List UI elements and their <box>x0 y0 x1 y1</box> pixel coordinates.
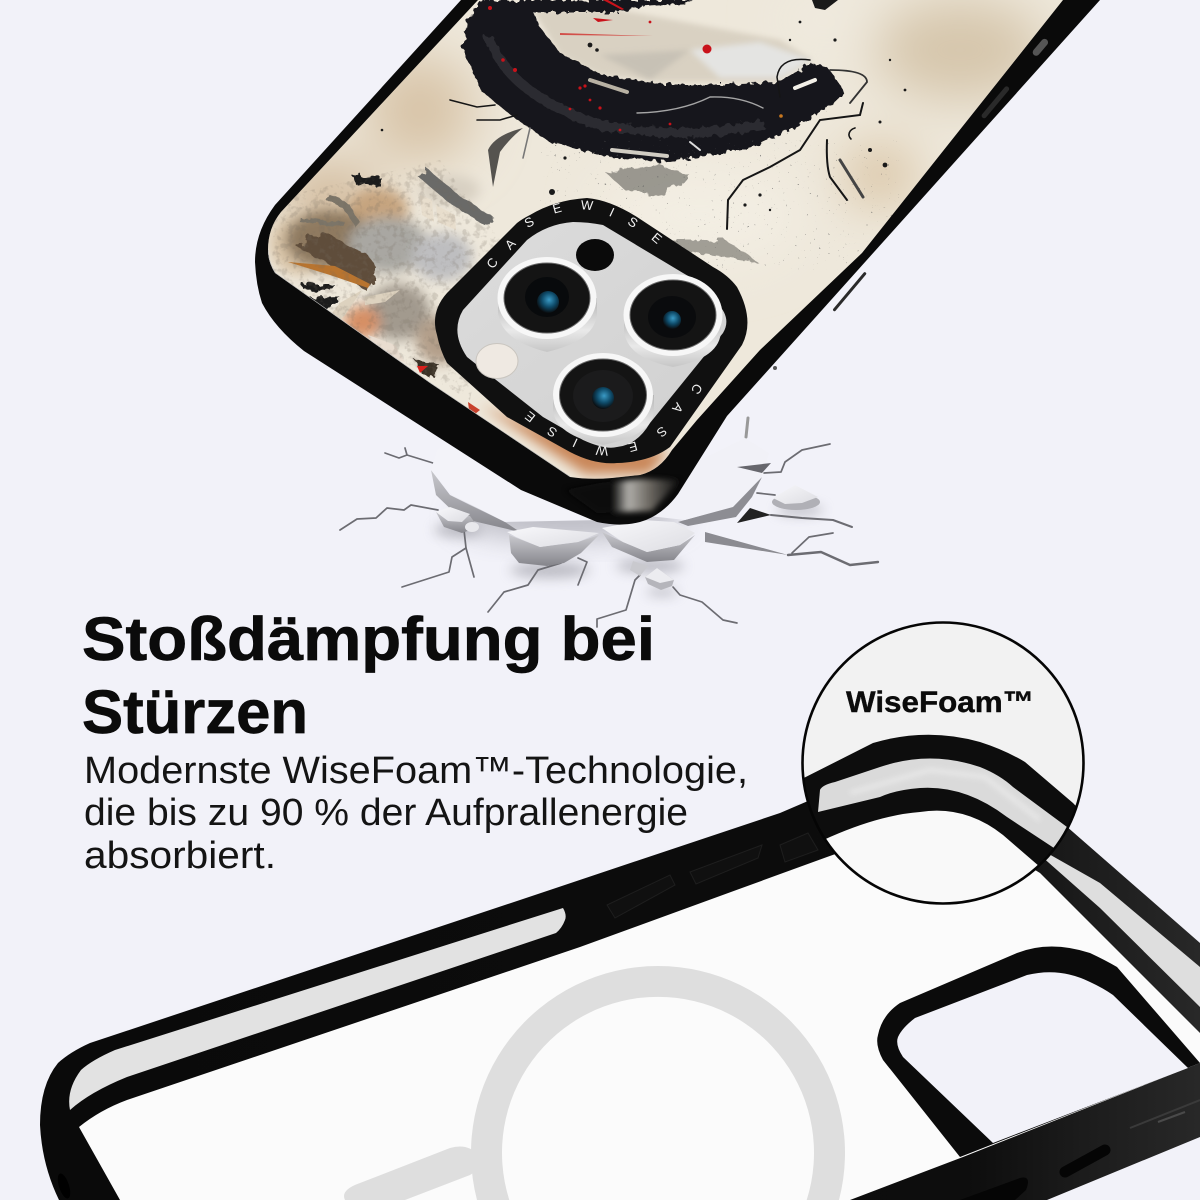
heading: Stoßdämpfung bei <box>82 605 655 673</box>
CASEWISE rim lettering: S <box>544 423 560 441</box>
swirl brush streaks <box>490 40 815 156</box>
left ground slab <box>431 440 600 532</box>
bumper highlight at corner <box>565 479 680 513</box>
CASEWISE rim lettering: E <box>649 230 665 247</box>
rock chunk: center right <box>602 520 695 562</box>
side buttons <box>773 37 1049 370</box>
CASEWISE rim lettering <box>483 197 706 459</box>
magnet alignment bar <box>344 1147 479 1200</box>
magnet ring <box>471 966 845 1200</box>
spike stroke <box>488 128 523 187</box>
WiseFoam label: WiseFoam™ <box>846 686 1034 719</box>
cracked ground impact <box>340 418 878 627</box>
left side air channel <box>69 908 566 1110</box>
clear back panel <box>79 815 1200 1200</box>
CASEWISE rim lettering: S <box>653 423 670 441</box>
camera cut-out <box>877 946 1200 1157</box>
CASEWISE rim lettering: I <box>570 435 580 450</box>
CASEWISE rim lettering: E <box>627 438 639 455</box>
case artwork <box>250 0 1080 490</box>
grey brush strokes <box>300 172 490 225</box>
CASEWISE rim lettering: E <box>551 200 563 217</box>
magnifier outline <box>802 622 1084 904</box>
orange streak <box>288 262 370 288</box>
crack lines <box>340 418 878 627</box>
CASEWISE rim lettering: C <box>688 381 706 397</box>
camera bump <box>435 197 747 463</box>
case bumper <box>255 0 1100 525</box>
magnifier callout <box>801 621 1085 905</box>
magnifier fill <box>802 622 1084 904</box>
transparent case photo <box>40 735 1200 1200</box>
rock chunk: left small <box>436 507 479 533</box>
camera rim <box>435 198 747 463</box>
lens 1 <box>498 257 597 352</box>
paper base <box>250 0 1080 490</box>
CASEWISE rim lettering: S <box>625 214 641 231</box>
dark brown mass <box>295 232 378 292</box>
heading <box>82 605 655 746</box>
case black frame <box>40 735 1200 1200</box>
swirl interior light wash <box>533 10 812 82</box>
side buttons <box>607 833 818 918</box>
wash blobs <box>272 0 1050 228</box>
CASEWISE rim lettering: W <box>580 197 594 213</box>
cream shards <box>328 195 456 362</box>
body text: absorbiert. <box>84 835 276 877</box>
channel highlight <box>850 770 1040 820</box>
flash <box>476 344 518 378</box>
microphone hole <box>576 239 614 271</box>
ink lines <box>450 59 867 229</box>
impact shadow <box>455 496 685 540</box>
fine speckle <box>540 140 900 270</box>
body text: Modernste WiseFoam™-Technologie, <box>84 750 748 792</box>
CASEWISE rim lettering: A <box>669 400 686 416</box>
CASEWISE rim lettering: W <box>595 443 609 459</box>
silver camera plate <box>457 222 726 448</box>
body text <box>84 750 748 877</box>
CASEWISE rim lettering: E <box>522 408 538 425</box>
phone with painted case <box>250 0 1100 525</box>
heading: Stürzen <box>82 678 308 746</box>
lens 2 <box>624 274 722 367</box>
red and black splatter <box>488 0 712 131</box>
rock chunk: center left <box>507 527 599 566</box>
CASEWISE rim lettering: I <box>607 205 617 220</box>
rock chunk: bottom pebbles <box>630 561 674 590</box>
CASEWISE rim lettering: C <box>483 255 501 271</box>
chunk shadows <box>434 505 824 596</box>
lens 3 <box>553 353 654 445</box>
red fleck <box>417 366 428 373</box>
CASEWISE rim lettering: S <box>522 213 537 231</box>
right ground slab <box>640 438 788 555</box>
magnified air channel <box>818 758 1067 850</box>
lower grey washes <box>605 165 690 195</box>
rock chunk: right pebble <box>772 485 820 510</box>
magnified case corner <box>804 734 1076 865</box>
dark brush marks <box>302 175 440 378</box>
black ink swirl <box>463 0 845 162</box>
magnified frame <box>804 734 1076 865</box>
camera cut-out opening <box>897 972 1188 1143</box>
art edge highlight <box>268 250 570 477</box>
bottom edge details <box>55 1100 1200 1200</box>
CASEWISE rim lettering: A <box>502 236 519 252</box>
lower left smoke and pigments <box>270 175 668 474</box>
magnified clear panel <box>800 800 1090 920</box>
right side air channel <box>1040 849 1200 1007</box>
body text: die bis zu 90 % der Aufprallenergie <box>84 792 688 834</box>
pigment grit <box>268 160 508 400</box>
